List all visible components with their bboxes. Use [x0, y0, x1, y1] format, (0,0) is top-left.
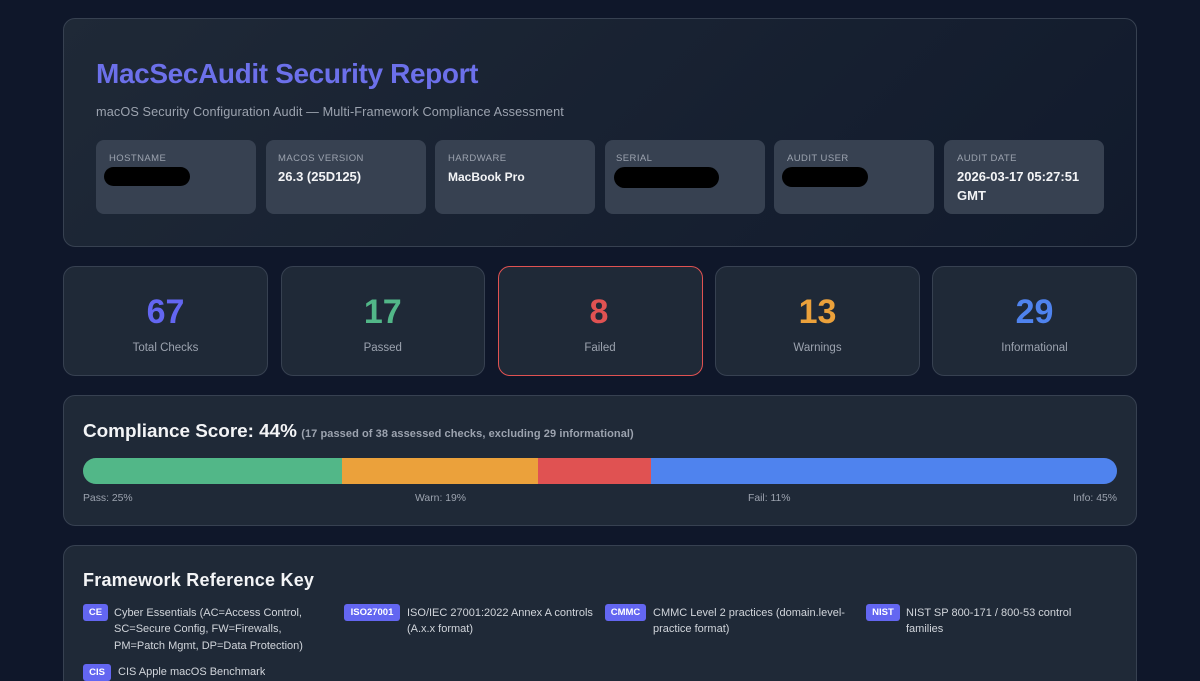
value: hardware: MacBook Pro	[448, 170, 525, 184]
badge: NIST: NIST	[872, 607, 894, 618]
stat card: passed	[280, 266, 485, 376]
description: CE: PM=Patch Mgmt, DP=Data Protection)	[114, 640, 303, 652]
subtitle: macOS Security Configuration Audit — Multi-Framework Compliance Assessment	[96, 105, 564, 119]
badge: CE	[83, 604, 108, 621]
value: failed: 8	[590, 293, 608, 331]
stacked progress bar	[83, 458, 1117, 484]
badge: ISO27001	[344, 604, 400, 621]
info card: audit user	[774, 140, 934, 214]
description: CIS: CIS Apple macOS Benchmark	[118, 666, 265, 678]
description: CE: SC=Secure Config, FW=Firewalls,	[114, 623, 282, 635]
badge: CIS	[83, 664, 111, 681]
bar label: info: Info: 45%	[1073, 493, 1117, 504]
stat card: warnings	[715, 266, 920, 376]
description: CMMC	[653, 606, 845, 635]
info card: hardware	[435, 140, 595, 214]
label: total checks: Total Checks	[133, 342, 198, 354]
panel: framework reference key	[63, 545, 1137, 681]
label: hardware: HARDWARE	[448, 153, 507, 164]
info card: hostname	[96, 140, 256, 214]
label: passed: Passed	[364, 342, 402, 354]
title: MacSecAudit Security Report	[96, 58, 478, 89]
segment: info	[651, 458, 1117, 484]
value: total checks: 67	[147, 293, 184, 331]
label: macOS version: MACOS VERSION	[278, 153, 364, 164]
bar label: fail: Fail: 11%	[748, 493, 791, 504]
bar label: pass: Pass: 25%	[83, 493, 133, 504]
badge: CE: CE	[89, 607, 102, 618]
value: informational: 29	[1016, 293, 1053, 331]
info card: serial	[605, 140, 765, 214]
value: audit date: GMT	[957, 188, 986, 202]
info card: audit date	[944, 140, 1104, 214]
description: ISO27001	[407, 606, 593, 635]
stat card: total checks	[63, 266, 268, 376]
description: CMMC: CMMC Level 2 practices (domain.level-	[653, 606, 845, 618]
value: audit date: 2026-03-17 05:27:51	[957, 169, 1079, 184]
bar label: warn: Warn: 19%	[415, 493, 466, 504]
redaction: serial	[614, 167, 719, 188]
stat card: informational	[932, 266, 1137, 376]
label: hostname: HOSTNAME	[109, 153, 166, 164]
value: warnings: 13	[799, 293, 836, 331]
segment: pass	[83, 458, 342, 484]
label: warnings: Warnings	[793, 342, 842, 354]
description: CE: Cyber Essentials (AC=Access Control,	[114, 606, 302, 618]
label: failed: Failed	[584, 342, 616, 354]
description: NIST	[906, 606, 1071, 635]
heading: framework reference key: Framework Reference Key	[83, 570, 314, 590]
segment: warn	[342, 458, 538, 484]
label: serial: SERIAL	[616, 153, 652, 164]
panel: report header	[63, 18, 1137, 247]
info card: macOS version	[266, 140, 426, 214]
badge: CMMC: CMMC	[611, 607, 640, 618]
stat card: failed	[498, 266, 702, 376]
description: NIST: NIST SP 800-171 / 800-53 control	[906, 606, 1071, 618]
segment: fail	[538, 458, 651, 484]
badge: NIST	[866, 604, 900, 621]
description: NIST: families	[906, 623, 943, 635]
redaction: audit user	[782, 167, 868, 187]
badge: ISO27001: ISO27001	[351, 607, 393, 618]
description: ISO27001: (A.x.x format)	[407, 623, 473, 635]
description: CE	[114, 606, 303, 652]
value: audit date	[957, 169, 1079, 202]
description: ISO27001: ISO/IEC 27001:2022 Annex A controls	[407, 606, 593, 618]
badge: CMMC	[605, 604, 646, 621]
description: CMMC: practice format)	[653, 623, 729, 635]
label: audit date: AUDIT DATE	[957, 153, 1017, 164]
redaction: hostname	[104, 167, 190, 186]
panel: compliance score	[63, 395, 1137, 526]
label: audit user: AUDIT USER	[787, 153, 849, 164]
heading: compliance score: Compliance Score: 44% (17 passed of 38 assessed checks, excluding 29 informational)	[83, 421, 634, 442]
badge: CIS: CIS	[89, 667, 105, 678]
value: passed: 17	[364, 293, 402, 331]
value: macOS version: 26.3 (25D125)	[278, 169, 361, 184]
label: informational: Informational	[1001, 342, 1068, 354]
